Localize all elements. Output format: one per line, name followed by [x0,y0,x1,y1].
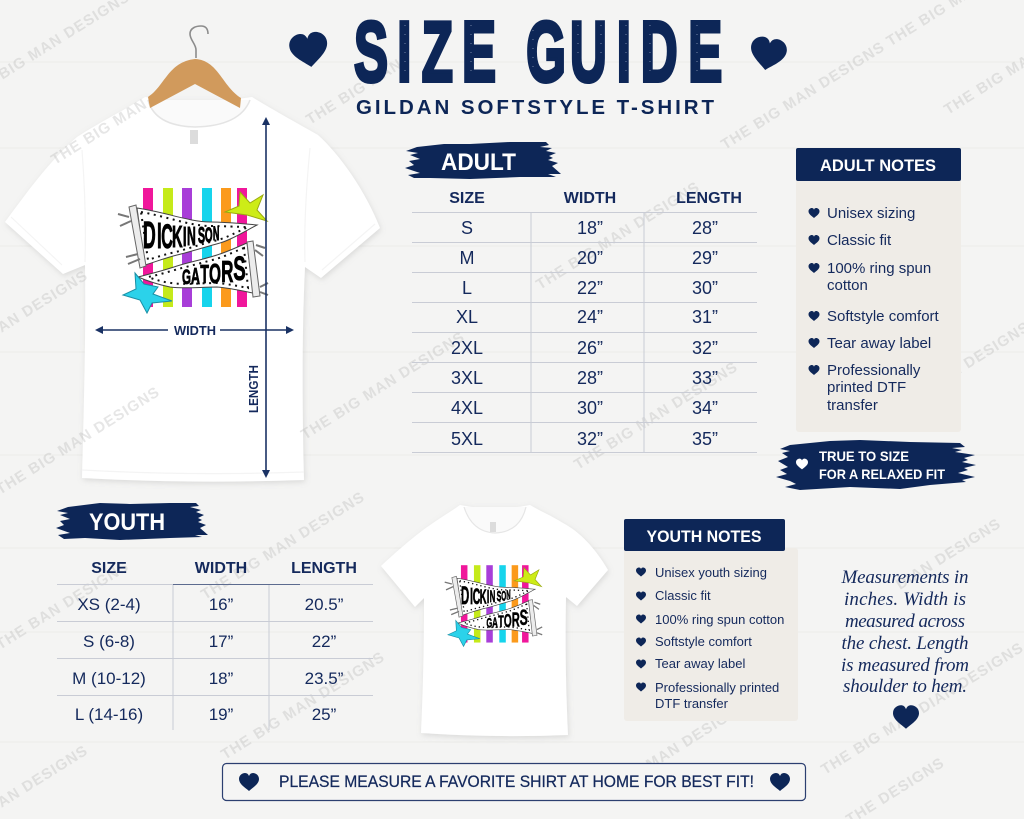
measurement note in script: measured across [845,611,965,632]
youth table rows: S (6-8) [83,632,135,651]
pennant: Dickinson: D [143,215,156,257]
pennant: Dickinson: N [187,223,196,251]
width arrow [95,323,294,338]
youth table rows: 17” [209,632,234,651]
table rows: 4XL [451,398,483,418]
small shirt graphic: Dickinson Gators pennants: O [501,589,506,604]
small shirt graphic: Dickinson Gators pennants: A [492,614,498,631]
table rows: XL [456,307,478,327]
adult notes list: transfer [827,397,878,414]
youth notes list: Classic fit [655,588,711,603]
large t-shirt [5,97,380,482]
small shirt graphic: Dickinson Gators pennants: R [512,609,520,631]
table rows: 34” [692,398,718,418]
title: E [462,5,496,99]
table rows: 3XL [451,368,483,388]
adult heading banner: ADULT [441,149,516,176]
pennant: Dickinson: N [213,225,219,245]
watermarks: THE BIG MAN DESIGNS [298,328,468,443]
table rows: 32” [692,338,718,358]
youth size table [57,560,373,730]
watermarks: THE BIG MAN [303,56,406,128]
hanger [148,26,241,108]
table header: SIZE [449,190,485,207]
large shirt graphic: Dickinson Gators pennants [118,188,268,313]
pennant: Dickinson: O [205,224,213,247]
panel: adult notes: ADULT NOTES [820,156,936,175]
youth notes list: Unisex youth sizing [655,565,767,580]
pennant: Gators: A [191,263,200,289]
youth table header: LENGTH [291,560,357,577]
length arrow: LENGTH [246,365,261,413]
bottom callout: PLEASE MEASURE A FAVORITE SHIRT AT HOME FOR BEST FIT! [279,773,754,791]
youth table header [91,560,357,577]
pennant: Dickinson: K [172,220,183,255]
measurement note in script: shoulder to hem. [843,676,967,697]
pennant: Gators: G [182,265,191,289]
small shirt graphic: Dickinson Gators pennants: S [497,588,501,605]
adult notes list: printed DTF [827,379,906,396]
youth notes list: Tear away label [655,656,745,671]
small shirt graphic: Dickinson Gators pennants: S [520,605,528,630]
youth notes list: 100% ring spun cotton [655,612,784,627]
panel: youth notes [624,519,798,721]
youth table rows: 22” [312,632,337,651]
youth table header: SIZE [91,560,127,577]
pennant: Gators: T [200,261,209,289]
table rows: 26” [577,338,603,358]
measurement note in script: is measured from [841,655,969,676]
youth table header: WIDTH [195,560,247,577]
table rows: 35” [692,429,718,449]
small shirt graphic: Dickinson Gators pennants: D [461,584,469,611]
pennant: Dickinson: I [183,220,186,252]
table rows: 28” [577,368,603,388]
adult notes list: Tear away label [827,335,931,352]
youth table rows: 16” [209,595,234,614]
table rows: 5XL [451,429,483,449]
adult notes list: Classic fit [827,232,892,249]
table header: WIDTH [564,190,616,207]
callout: true to size [776,440,976,490]
youth heading banner [56,503,208,540]
small shirt graphic: Dickinson Gators pennants: C [473,584,480,609]
pennant: Gators: S [233,249,246,287]
adult notes list: Professionally [827,362,921,379]
youth table rows: 25” [312,705,337,724]
youth table rows: 20.5” [305,595,344,614]
title: G [526,5,566,99]
table rows: 30” [692,278,718,298]
youth table rows: XS (2-4) [77,595,141,614]
pennant: Gators [138,241,268,297]
table rows: M [460,248,474,268]
youth table rows: 23.5” [305,669,344,688]
small shirt graphic: Dickinson Gators pennants [445,565,542,646]
adult notes list: Unisex sizing [827,205,915,222]
watermarks: THE BIG MAN DESIGNS [533,178,703,293]
subtitle: GILDAN SOFTSTYLE T-SHIRT [356,96,714,119]
watermarks: DIAN DESIGNS [893,515,1004,593]
adult heading banner [405,142,561,179]
small shirt graphic: Dickinson Gators pennants: N [490,587,495,606]
pennant: Dickinson: I [157,216,162,256]
small shirt graphic: Dickinson Gators pennants: K [480,587,487,609]
watermarks: THE BIG MAN [48,96,151,168]
measurement note in script [840,567,969,697]
table rows: 18” [577,218,603,238]
star: lime [225,192,267,221]
watermarks: THE BIG MAN DESIGNS [218,648,388,763]
panel: adult notes [796,148,961,432]
small shirt graphic: Dickinson Gators pennants: T [498,612,504,631]
pennant: Dickinson: S [198,223,205,248]
title: U [570,5,607,99]
watermarks: MAN DESIGNS [643,697,751,773]
youth notes list: DTF transfer [655,696,729,711]
table rows: 20” [577,248,603,268]
icon: heart left [288,30,330,70]
youth table rows: 19” [209,705,234,724]
table rows: L [462,278,472,298]
title: D [641,5,678,99]
small youth t-shirt [381,505,608,736]
length arrow [246,117,270,478]
callout: true to size: TRUE TO SIZE [819,448,909,464]
measurement note in script: inches. Width is [844,589,966,610]
icon: heart right [747,35,789,73]
small shirt graphic: Dickinson Gators pennants: I [470,582,473,609]
pennant: Gators: O [209,258,221,289]
small shirt graphic: Dickinson Gators pennants: N [506,589,511,603]
youth notes list: Professionally printed [655,680,779,695]
callout: true to size: FOR A RELAXED FIT [819,466,945,482]
small shirt graphic: Dickinson Gators pennants: G [486,616,492,631]
table rows: 32” [577,429,603,449]
panel: youth notes: YOUTH NOTES [646,527,762,546]
title: Z [422,5,453,99]
pennant: Dickinson: C [161,217,173,256]
icon: heart under note [893,705,919,729]
table rows: 2XL [451,338,483,358]
small shirt graphic: Dickinson Gators pennants: I [487,588,489,608]
measurement note in script: the chest. Length [842,633,968,654]
youth table rows: L (14-16) [75,705,143,724]
title: I [397,5,411,99]
width arrow: WIDTH [174,323,216,338]
youth table rows [72,595,344,724]
table rows [451,218,718,449]
table header: LENGTH [676,190,742,207]
measurement note in script: Measurements in [840,567,968,588]
adult notes list: Softstyle comfort [827,308,940,325]
pennant: Gators: R [221,255,233,289]
youth notes list [636,565,784,711]
adult size table [412,190,757,452]
bottom callout [222,764,806,800]
title: S [354,5,388,99]
table rows: 33” [692,368,718,388]
watermarks: THE BIG MAN DESIGNS [571,358,741,473]
small shirt graphic: Dickinson Gators pennants: O [504,612,512,632]
youth heading banner: YOUTH [89,509,165,536]
watermarks: THE BIG MAN DESIGNS [198,488,368,603]
star: cyan [123,273,172,313]
title: E [688,5,722,99]
table rows: S [461,218,473,238]
table rows: 22” [577,278,603,298]
title: I [617,5,631,99]
table rows: 24” [577,307,603,327]
adult notes list: 100% ring spun [827,260,931,277]
pennant: Dickinson [118,205,257,268]
table rows: 31” [692,307,718,327]
youth table rows: M (10-12) [72,669,146,688]
youth notes list: Softstyle comfort [655,634,752,649]
table rows: 29” [692,248,718,268]
colored stripes [143,188,247,307]
adult notes list [808,205,940,414]
table header [449,190,742,207]
youth table rows: 18” [209,669,234,688]
adult notes list: cotton [827,277,868,294]
watermarks: THE BIG MAN DIAN DESIGNS [818,639,1024,778]
table rows: 28” [692,218,718,238]
table rows: 30” [577,398,603,418]
